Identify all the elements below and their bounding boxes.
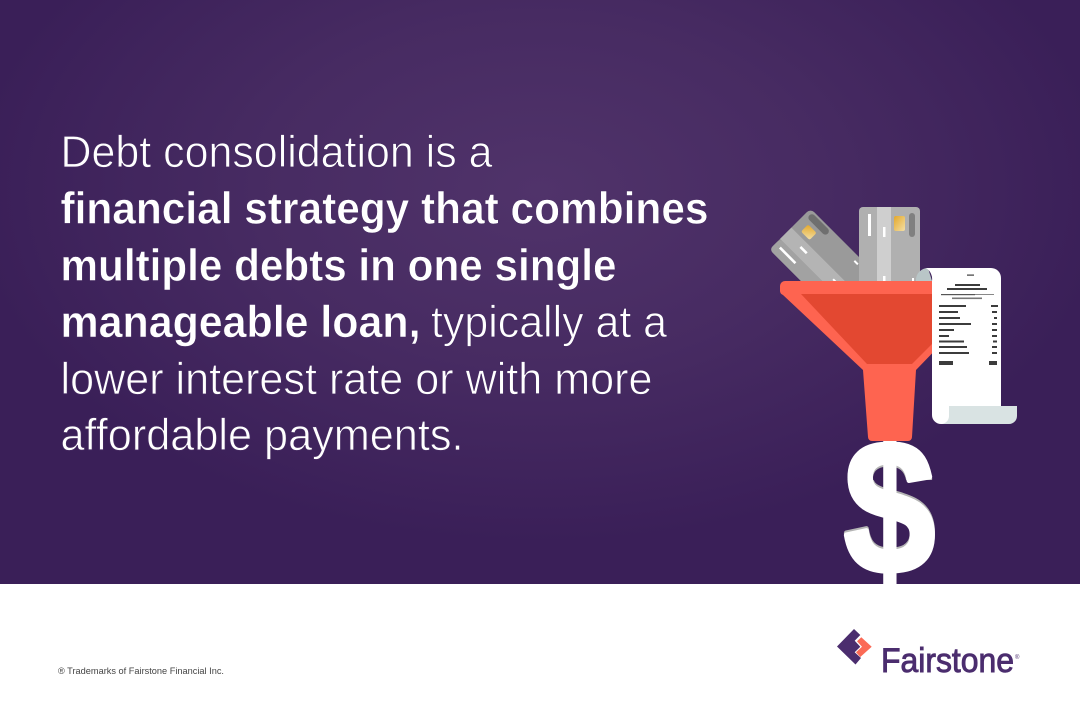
icon: tilted credit card (771, 210, 859, 281)
logo mark (837, 629, 872, 664)
registered mark: ® (1015, 654, 1020, 661)
headline text block: multiple debts in one single (60, 242, 616, 290)
headline text block: financial strategy that combines (60, 184, 708, 234)
headline text block: Debt consolidation is a (60, 128, 493, 177)
icon: dollar sign (844, 441, 935, 584)
headline text block: lower interest rate or with more (60, 355, 652, 404)
illustration: debts funnelled into a dollar (769, 207, 1017, 616)
icon: dollar sign: $ (844, 400, 935, 614)
headline text block: manageable loan, (60, 298, 420, 347)
white footer panel (0, 584, 1080, 720)
trademark note: ® Trademarks of Fairstone Financial Inc. (58, 666, 224, 677)
headline text block: affordable payments. (60, 411, 464, 460)
icon: upright credit card (859, 207, 920, 281)
headline text block (60, 128, 708, 460)
Fairstone logo (837, 629, 1020, 680)
logo wordmark: Fairstone (881, 642, 1014, 680)
icon: receipt (916, 268, 1017, 424)
icon: funnel (780, 281, 945, 441)
headline text block: typically at a (431, 298, 667, 347)
icon: dollar sign: $ (844, 402, 935, 616)
icon: dollar sign: $ (844, 398, 935, 612)
